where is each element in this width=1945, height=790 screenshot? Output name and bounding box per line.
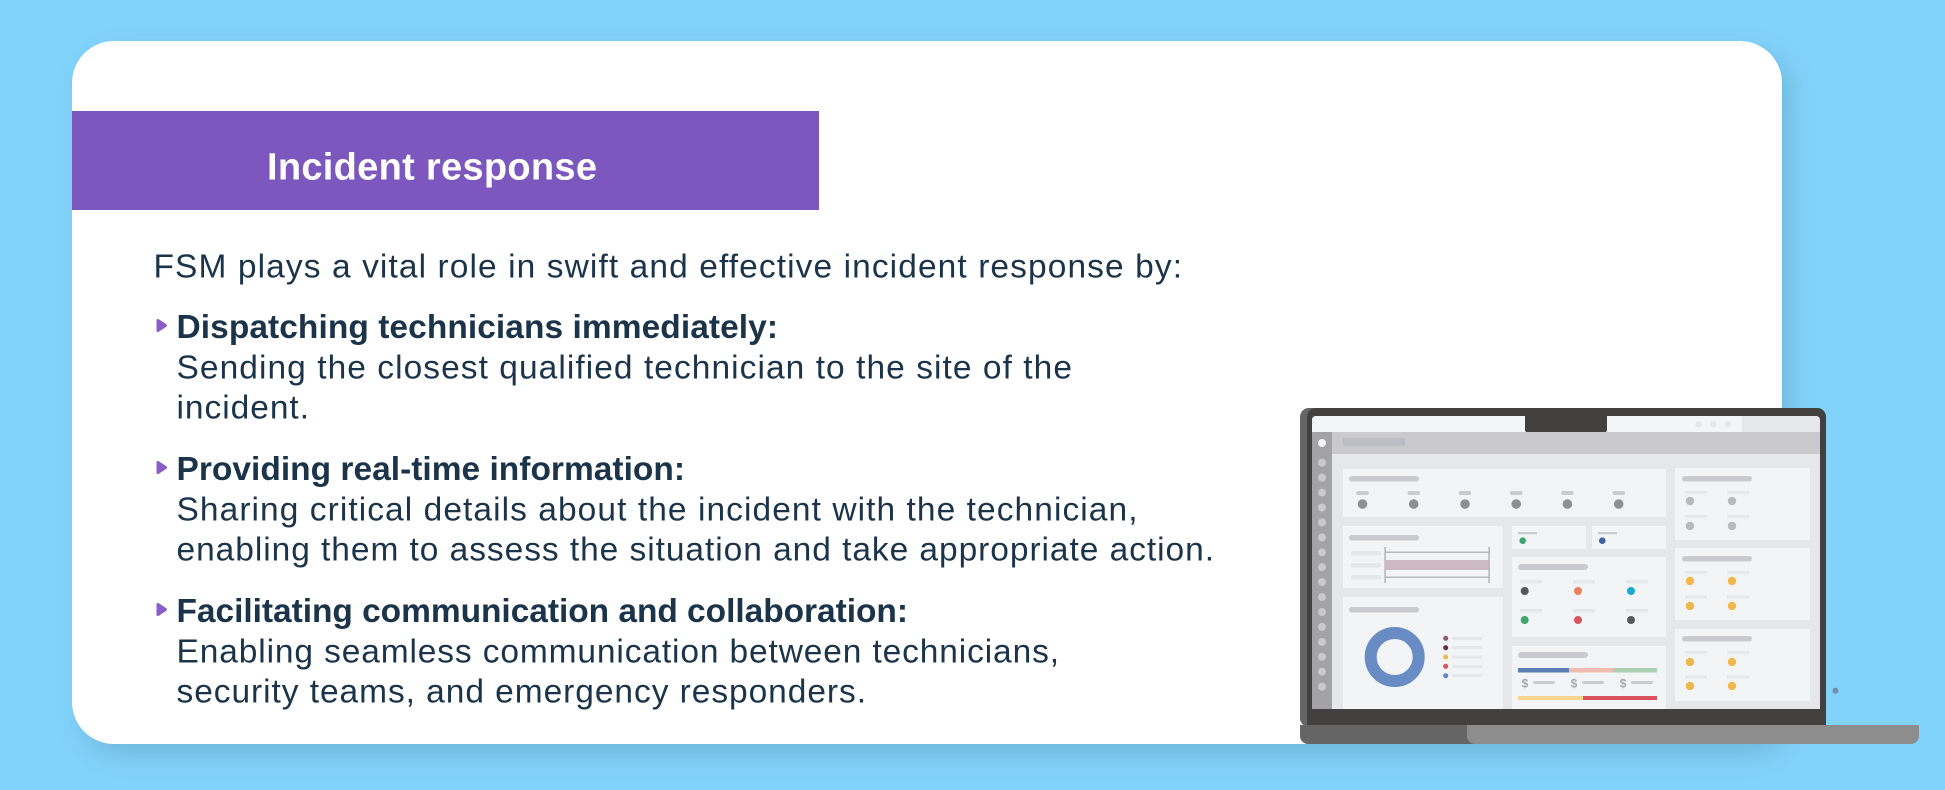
laptop lid (1300, 408, 1826, 727)
widget: donut chart (1343, 597, 1503, 709)
widget: status grid (1512, 557, 1666, 637)
list item: communication and collaboration: Enabling seamless communication between technicians, (176, 634, 1059, 670)
widget: grey metrics (1675, 468, 1810, 540)
camera notch (1525, 416, 1607, 432)
list item: real-time information: Providing real-time information: (176, 451, 685, 488)
sidebar (1312, 432, 1332, 709)
intro text: FSM plays a vital role in swift and effective incident response by: (154, 248, 1182, 286)
list item: dispatching technicians: incident. (176, 390, 309, 426)
list item: dispatching technicians (156, 309, 1072, 426)
widget: range chart (1343, 526, 1503, 588)
panel: white card (72, 41, 1782, 744)
list item: communication and collaboration: Facilitating communication and collaboration: (176, 593, 908, 630)
heading banner: Incident response (267, 146, 597, 188)
list item: dispatching technicians: Dispatching technicians immediately: (176, 309, 778, 346)
list item: communication and collaboration (156, 593, 1059, 710)
laptop illustration (1300, 408, 1919, 744)
widget: orange metrics two (1675, 629, 1810, 701)
widget: green status (1512, 526, 1586, 549)
heading banner (72, 111, 819, 210)
widget: orange metrics one (1675, 548, 1810, 620)
list item: real-time information (156, 451, 1214, 568)
laptop base (1300, 725, 1919, 744)
widget: cost bars (1512, 646, 1666, 709)
list item: communication and collaboration: security teams, and emergency responders. (176, 674, 866, 710)
widget: cost bars: $ (1522, 676, 1529, 690)
browser bar (1312, 416, 1820, 432)
widget: cost bars: $ (1620, 676, 1627, 690)
widget: blue status (1592, 526, 1666, 549)
widget: cost bars: $ (1571, 676, 1578, 690)
list item: dispatching technicians: Sending the closest qualified technician to the site of the (176, 350, 1072, 386)
list item: real-time information: enabling them to assess the situation and take appropriate action. (176, 532, 1214, 568)
icon: small status dot (1832, 688, 1838, 694)
list item: real-time information: Sharing critical details about the incident with the technician, (176, 492, 1138, 528)
screen background (1312, 416, 1820, 709)
app header (1332, 432, 1820, 454)
widget: top metrics (1343, 469, 1666, 517)
